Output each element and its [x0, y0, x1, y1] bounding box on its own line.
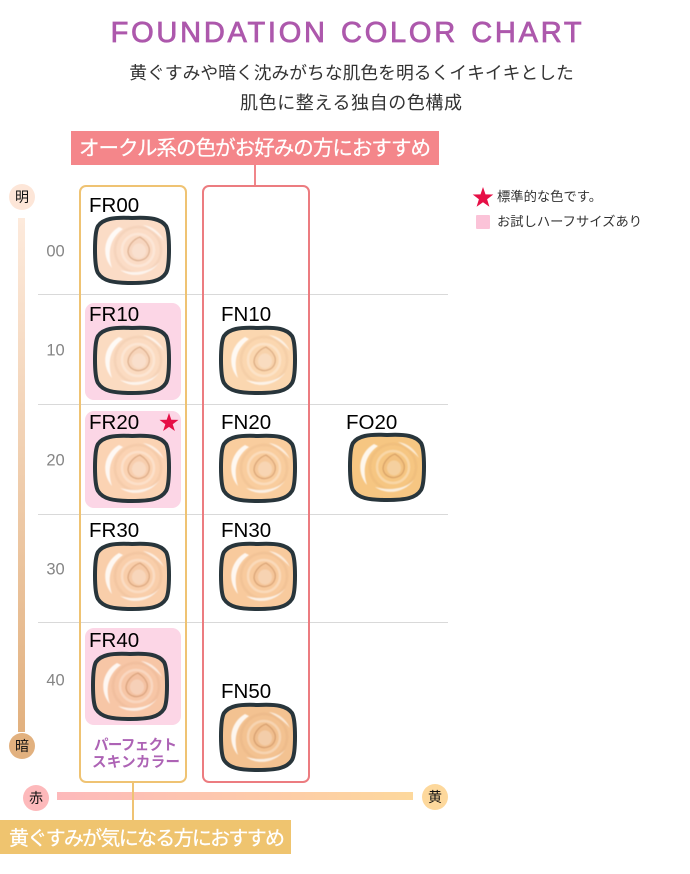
- banner: yellow dullness recommendation: 黄ぐすみが気になる方におすすめ: [9, 827, 285, 850]
- icon: legend star: [473, 187, 493, 207]
- panel: perfect skin color column: [80, 186, 186, 782]
- icon: standard star: [160, 413, 178, 431]
- hue axis: [23, 784, 448, 811]
- swatch FR00: FR00: [89, 194, 139, 217]
- swatch FN50: [221, 680, 295, 770]
- legend: [473, 187, 642, 229]
- level labels: 10: [46, 342, 65, 360]
- swatch FN10: FN10: [221, 303, 271, 326]
- swatch FR10: [89, 303, 169, 393]
- swatch FR30: FR30: [89, 519, 139, 542]
- subtitle: 肌色に整える独自の色構成: [240, 93, 462, 113]
- panel: FN column: [203, 186, 309, 782]
- swatch FR20: [89, 411, 178, 501]
- title: FOUNDATION COLOR CHART: [111, 17, 584, 49]
- swatch FN30: [221, 519, 295, 609]
- brightness axis: 明: [15, 189, 29, 205]
- subtitle: [129, 63, 574, 113]
- swatch FN50: FN50: [221, 680, 271, 703]
- perfect skin color label: スキンカラー: [92, 754, 180, 771]
- subtitle: 黄ぐすみや暗く沈みがちな肌色を明るくイキイキとした: [129, 63, 574, 83]
- swatch FR30: [89, 519, 169, 609]
- banner: ochre recommendation: [71, 131, 439, 186]
- level labels: 20: [46, 452, 65, 470]
- legend: お試しハーフサイズあり: [497, 214, 642, 229]
- brightness axis: 暗: [15, 738, 29, 754]
- level labels: 30: [46, 560, 65, 578]
- banner: ochre recommendation: オークル系の色がお好みの方におすすめ: [79, 137, 431, 160]
- swatch FN20: FN20: [221, 411, 271, 434]
- swatch FN20: [221, 411, 295, 501]
- level labels: [46, 242, 65, 690]
- legend: 標準的な色です。: [497, 189, 602, 204]
- swatch FN10: [221, 303, 295, 393]
- level labels: 00: [46, 242, 65, 260]
- swatch FO20: [346, 411, 424, 500]
- brightness axis: [9, 184, 35, 759]
- swatch FR40: FR40: [89, 629, 139, 652]
- hue axis: 黄: [428, 789, 442, 805]
- grid lines: [38, 294, 448, 622]
- banner: yellow dullness recommendation: [0, 782, 291, 854]
- swatch FO20: FO20: [346, 411, 397, 434]
- perfect skin color label: [92, 737, 180, 771]
- swatch FR40: [89, 629, 167, 719]
- swatch FR20: FR20: [89, 411, 139, 434]
- hue axis: 赤: [29, 790, 43, 806]
- swatch FN30: FN30: [221, 519, 271, 542]
- half-size highlights: [85, 303, 181, 725]
- swatch FR00: [89, 194, 169, 283]
- level labels: 40: [46, 672, 65, 690]
- perfect skin color label: パーフェクト: [94, 737, 177, 754]
- swatch FR10: FR10: [89, 303, 139, 326]
